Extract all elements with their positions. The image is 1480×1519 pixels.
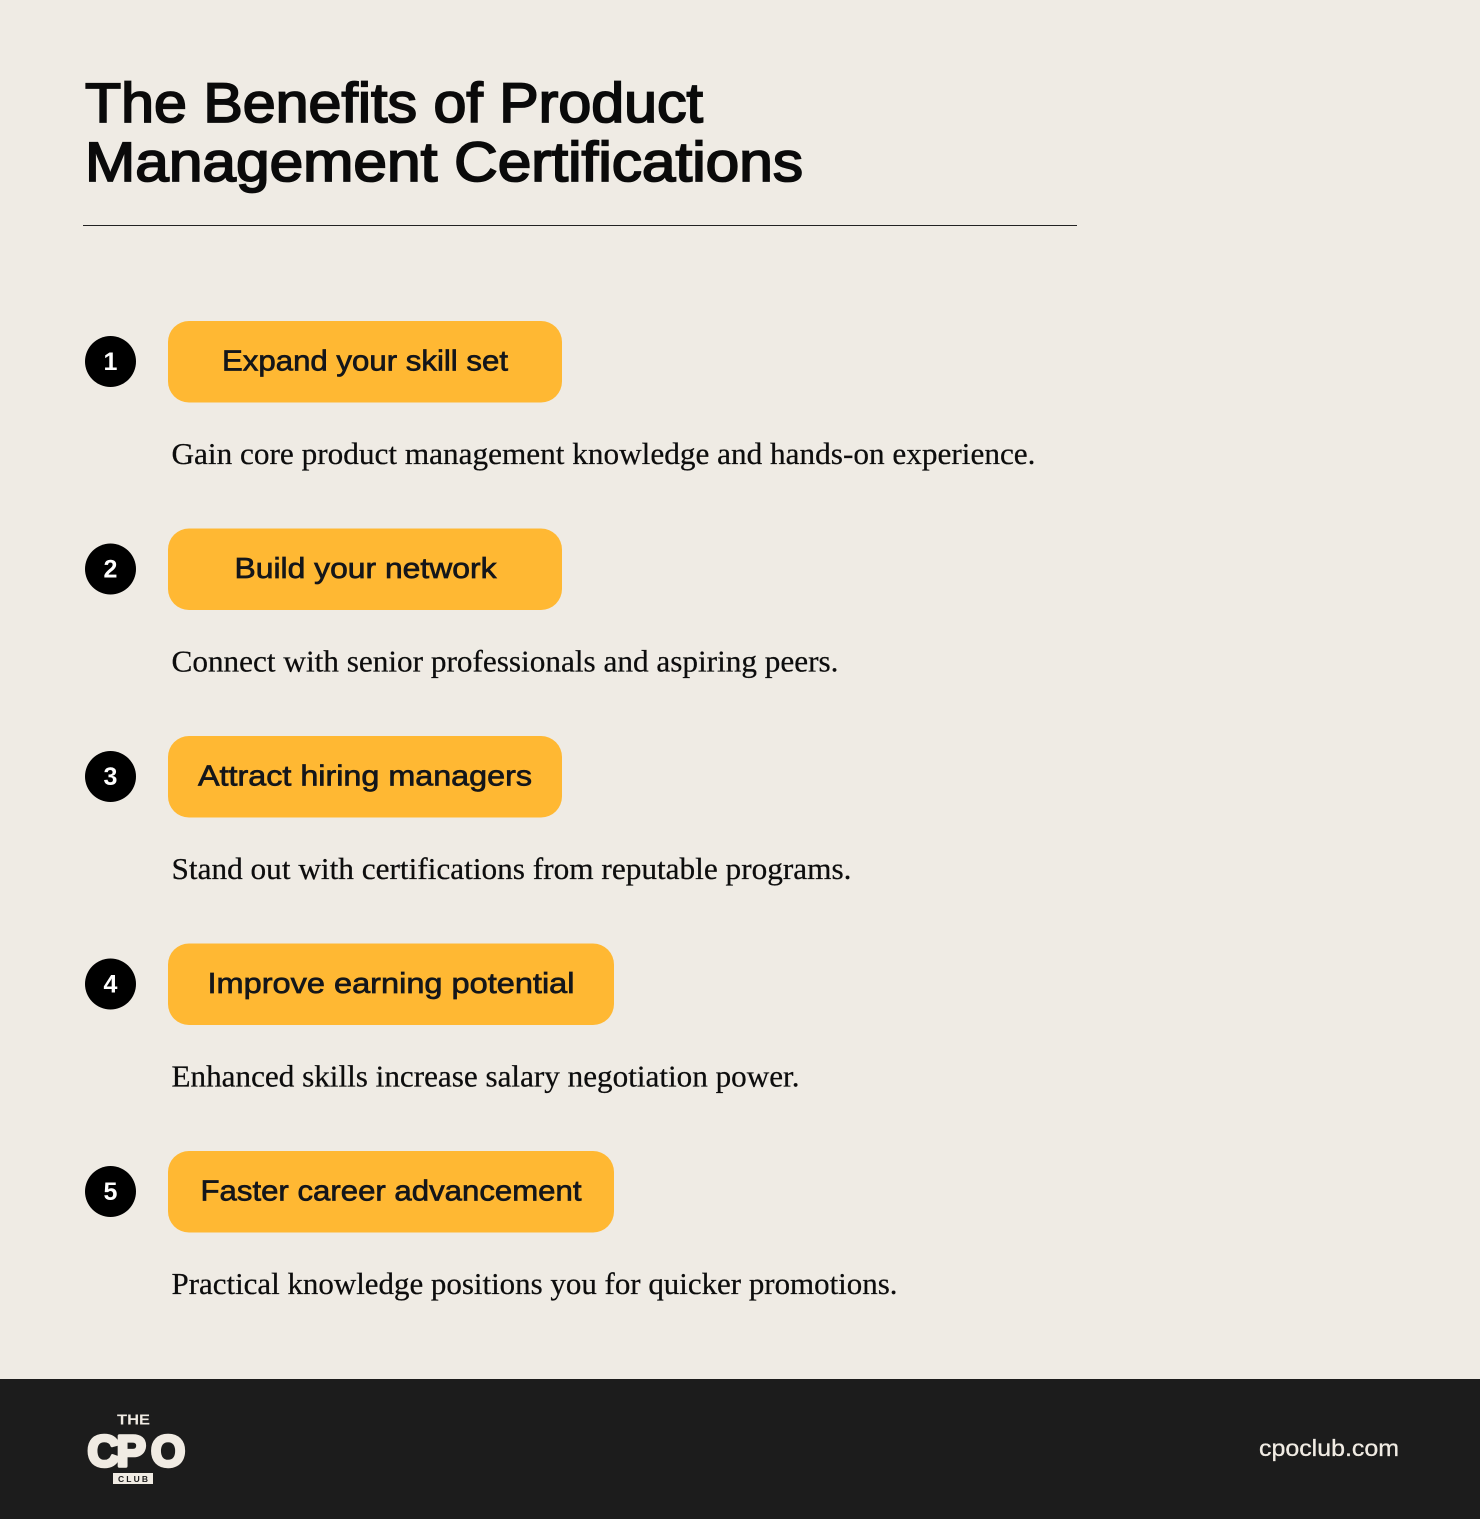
number badge 1: 1	[104, 348, 118, 376]
benefit 3	[85, 736, 852, 886]
description 4: Enhanced skills increase salary negotiation power.	[172, 1058, 800, 1094]
number badge 2	[85, 544, 136, 594]
label: Improve earning potential: Improve earning potential	[208, 968, 574, 1000]
title: Management Certifications	[85, 130, 803, 193]
website url: cpoclub.com	[1259, 1435, 1399, 1461]
logo: The CPO Club: CPO	[88, 1427, 185, 1476]
number badge 1	[85, 336, 136, 387]
number badge 5	[85, 1166, 136, 1217]
label: Improve earning potential	[168, 944, 614, 1025]
label: Build your network: Build your network	[234, 553, 497, 585]
description 2: Connect with senior professionals and aspiring peers.	[172, 644, 838, 678]
label: Expand your skill set: Expand your skill set	[222, 346, 508, 378]
label: Build your network	[168, 528, 562, 610]
number badge 5: 5	[104, 1178, 118, 1206]
number badge 4: 4	[104, 970, 118, 998]
description 5: Practical knowledge positions you for quicker promotions.	[172, 1266, 898, 1301]
number badge 2: 2	[104, 556, 117, 584]
title: The Benefits of Product	[85, 71, 703, 134]
logo: The CPO Club	[88, 1412, 185, 1484]
label: Attract hiring managers	[168, 736, 562, 818]
description 3: Stand out with certifications from reputable programs.	[172, 851, 852, 886]
label: Expand your skill set	[168, 321, 562, 402]
benefit 1	[85, 321, 1036, 471]
description 1: Gain core product management knowledge and hands-on experience.	[172, 436, 1036, 471]
benefit 5	[85, 1151, 898, 1301]
logo: The CPO Club: CLUB	[118, 1474, 148, 1484]
label: Faster career advancement	[168, 1151, 614, 1232]
number badge 3	[85, 751, 136, 802]
label: Attract hiring managers: Attract hiring managers	[198, 760, 532, 792]
footer bar	[0, 1379, 1480, 1519]
label: Faster career advancement: Faster career advancement	[200, 1176, 582, 1208]
title	[85, 71, 803, 193]
number badge 4	[85, 958, 136, 1010]
benefit 4	[85, 944, 800, 1094]
number badge 3: 3	[104, 763, 117, 791]
benefit 2	[85, 528, 838, 678]
logo: The CPO Club: THE	[117, 1412, 150, 1428]
